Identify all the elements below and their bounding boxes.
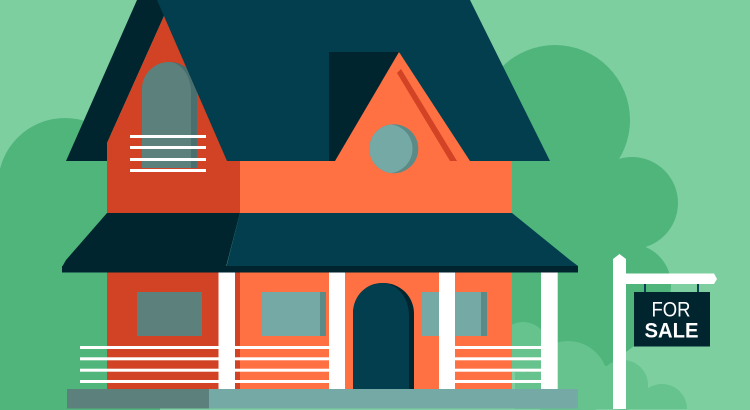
window: ground right [422,292,487,336]
roof: porch [226,213,578,268]
railing: attic balcony [130,135,206,172]
tree: left [0,118,160,410]
roof: shaded left gable [66,0,164,161]
roof: porch shaded left [62,213,240,267]
porch columns [218,272,558,389]
sign arm [626,274,717,284]
sign hangers [644,284,699,292]
window: round dormer [364,124,418,173]
wall: lower shaded left [107,272,240,389]
wall: upper orange [240,161,512,213]
window: ground left [137,292,202,336]
door [353,283,414,389]
sign text: FOR: FOR [652,298,690,322]
for sale sign [613,254,717,409]
dormer: triangle gable [335,52,470,161]
sign post [613,254,626,409]
railing: porch right [454,346,542,383]
dormer shadow [329,52,400,161]
window: ground middle [262,292,326,336]
wall: lower orange [240,272,512,389]
wall: shaded upper gable [107,16,240,213]
roof: porch eave [62,266,578,272]
sign text: SALE: SALE [644,319,698,342]
roof: main [157,0,550,161]
bushes: lower right [498,322,687,410]
foundation [67,389,578,408]
railing: porch left [80,346,330,383]
sign board [634,292,710,346]
tree: right [480,45,678,372]
dormer trim stripe [397,69,457,161]
house [62,0,578,408]
window: arched attic [142,62,197,168]
